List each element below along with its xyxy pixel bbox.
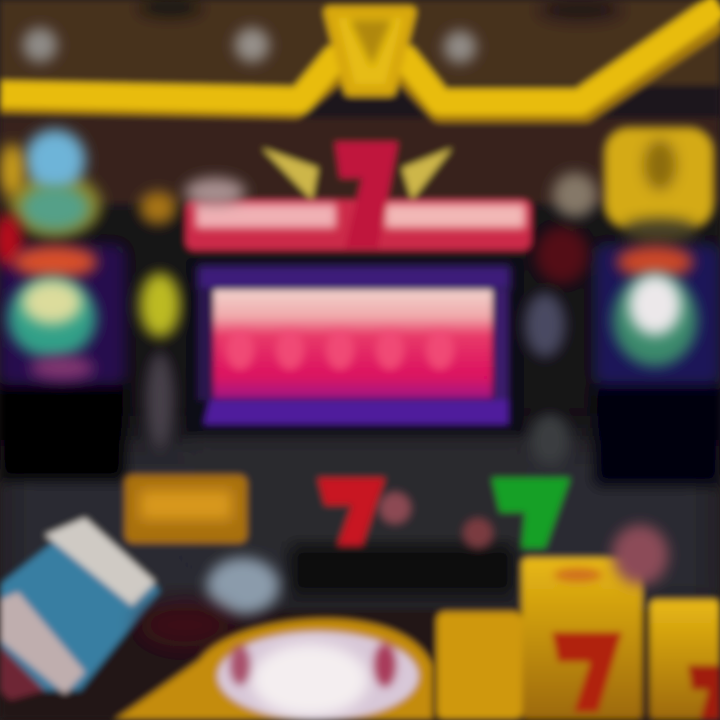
gold ceiling band: [0, 5, 720, 112]
left slot machine: [0, 130, 125, 385]
side decoration column: [140, 192, 180, 448]
screen frame: [186, 258, 524, 436]
roulette wheel: [115, 619, 432, 720]
center slot machine: [185, 142, 531, 595]
gold reel blocks with sevens: [437, 525, 720, 720]
marquee sign: [186, 200, 531, 250]
right slot machine: [525, 128, 720, 466]
marquee rays: [262, 148, 452, 200]
red seven on right reel: [688, 665, 720, 720]
orange button: [125, 475, 247, 543]
green seven: [492, 478, 570, 548]
control panel: [190, 445, 530, 555]
dark red floor shadow: [140, 603, 230, 647]
screen reels: [214, 290, 492, 398]
stack of chips bottom left: [0, 518, 160, 700]
red seven: [318, 478, 493, 548]
ceiling lights: [23, 0, 620, 63]
marquee red seven: [335, 142, 398, 248]
red seven on reel: [552, 632, 622, 712]
white chip: [207, 558, 279, 614]
screen reel scallops: [226, 330, 454, 370]
